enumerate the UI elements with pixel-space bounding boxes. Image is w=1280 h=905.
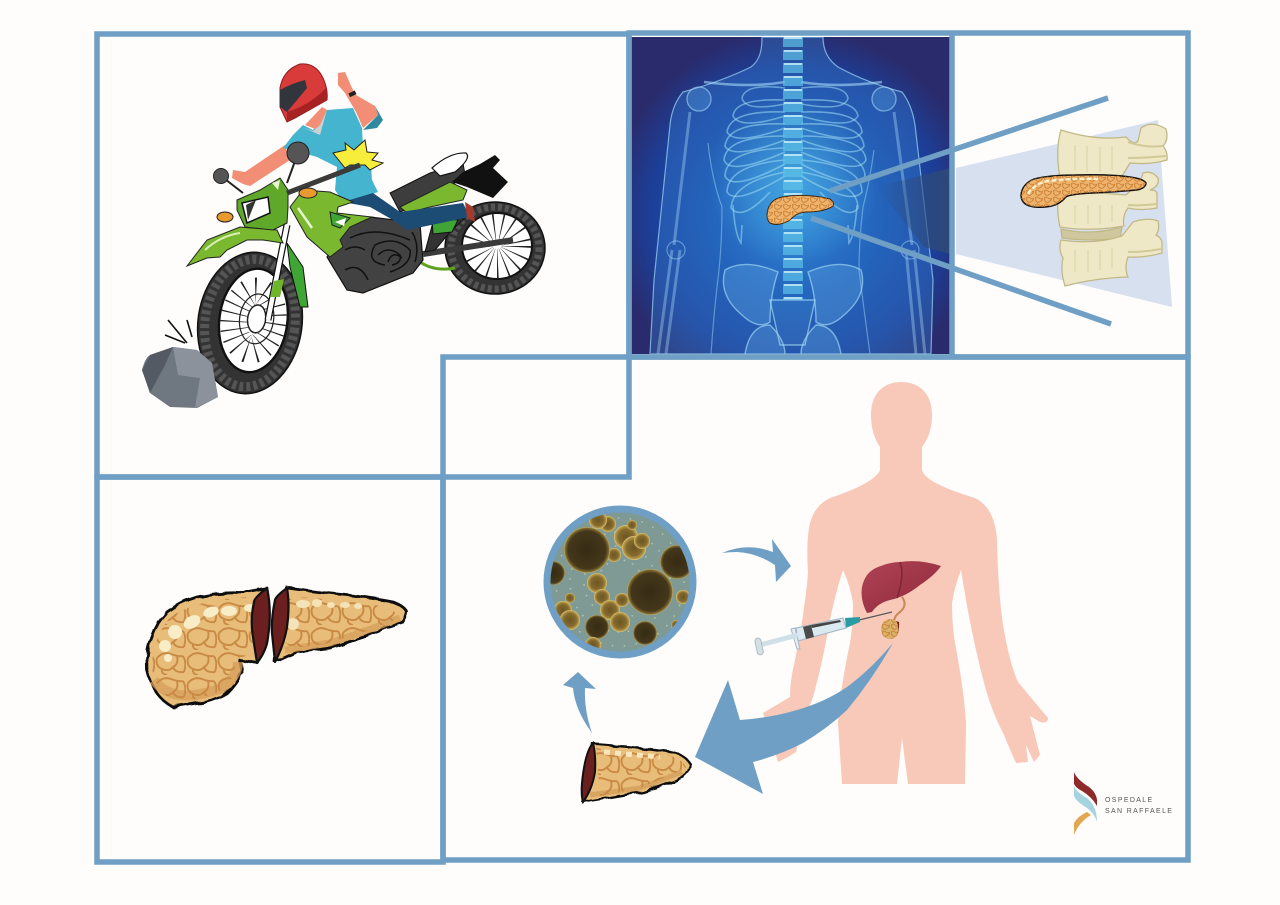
- arm bones: [658, 112, 925, 354]
- impact burst: [333, 140, 383, 170]
- panel: person's silhouette: [763, 382, 1048, 784]
- sleeve: [363, 106, 383, 130]
- vertebrae: [783, 37, 803, 300]
- front fairing: [237, 178, 288, 230]
- spine glow: [720, 108, 865, 248]
- zoom wedge: [956, 120, 1172, 307]
- middle vertebra: [1058, 172, 1158, 229]
- rib cage: [724, 87, 866, 243]
- raised arm: [338, 72, 378, 128]
- icon: ruptured pancreas: [147, 588, 407, 707]
- mirrors: [221, 153, 298, 193]
- icon: syringe: [754, 612, 892, 655]
- front fork and fender: [287, 243, 308, 307]
- icon: lumbar vertebrae: [1058, 124, 1167, 286]
- frame: ruptured pancreas: [97, 477, 443, 862]
- engine: [327, 217, 423, 293]
- x-ray torso panel: [631, 37, 950, 354]
- fuel tank: [290, 190, 372, 257]
- neck: [305, 107, 327, 130]
- arrow: pancreas to tail fragment: [695, 643, 893, 794]
- helmet: [280, 64, 327, 122]
- logo wordmark: OSPEDALE: [1105, 797, 1154, 804]
- headlight: [242, 197, 270, 223]
- icon: liver: [862, 561, 941, 622]
- pancreas tail section: [272, 588, 407, 662]
- extended arm: [232, 145, 290, 186]
- microscope view of islet spheroids: [541, 509, 694, 655]
- culture medium specks: [556, 518, 684, 646]
- rider: [232, 64, 475, 230]
- zoom shadow over x-ray: [887, 168, 950, 254]
- frame: anatomy: [629, 33, 1188, 357]
- shoe: [465, 202, 475, 222]
- zoom callout lines: [811, 98, 1111, 324]
- swingarm: [423, 240, 513, 254]
- arrow: cells to patient: [722, 539, 791, 582]
- clavicles and shoulders: [687, 82, 896, 111]
- icon: pancreas tail fragment: [582, 743, 690, 802]
- frame: islet transplantation: [443, 357, 1188, 860]
- seat and tail: [390, 163, 465, 212]
- elbows: [667, 241, 919, 259]
- impact lines: [165, 320, 192, 343]
- icon: motorcycle crash: [142, 64, 545, 408]
- spheroids: [550, 514, 689, 648]
- rear wheel: [445, 202, 545, 294]
- handlebar: [287, 165, 360, 193]
- logo: Ospedale San Raffaele: SAN RAFFAELE: [1105, 808, 1173, 815]
- rock: [142, 347, 218, 408]
- arrow: tail fragment to cells: [563, 672, 596, 733]
- front mudguard: [187, 227, 283, 266]
- pelvis: [723, 264, 863, 354]
- rear suspension: [425, 218, 465, 252]
- icon: small pancreas remnant: [881, 619, 899, 639]
- rear green fairing: [400, 182, 467, 213]
- body silhouette: [650, 37, 933, 354]
- panel frames: [97, 33, 1188, 862]
- trousers: [343, 193, 470, 230]
- pancreas head section: [147, 588, 270, 707]
- frame: crash: [97, 34, 629, 477]
- logo: Ospedale San Raffaele: [1074, 772, 1173, 835]
- shirt: [283, 108, 378, 202]
- front wheel: [189, 245, 311, 401]
- bottom vertebra: [1060, 219, 1162, 286]
- pancreas on x-ray: [767, 195, 834, 224]
- indicators: [217, 212, 233, 222]
- torso inner outline: [708, 143, 874, 354]
- top vertebra: [1058, 124, 1167, 178]
- icon: pancreas on vertebrae: [1021, 175, 1146, 207]
- intervertebral disc: [1061, 227, 1122, 240]
